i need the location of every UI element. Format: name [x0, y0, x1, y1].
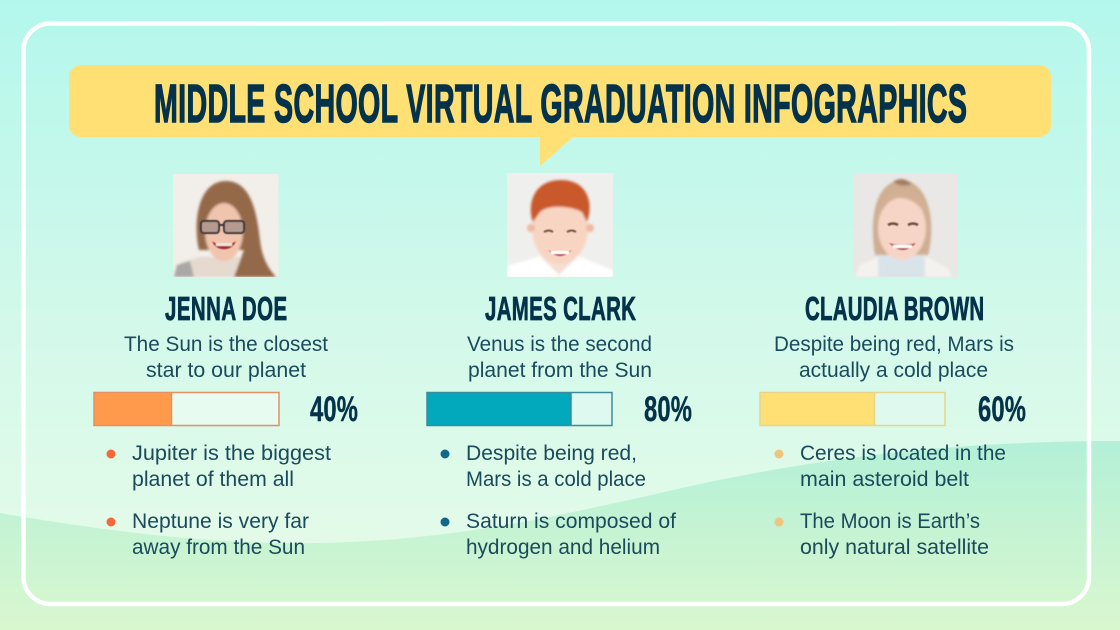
description: Venus is the second — [467, 333, 652, 356]
bullet list — [106, 442, 331, 559]
photo: Claudia Brown — [853, 174, 958, 277]
description: planet from the Sun — [468, 359, 652, 382]
progress bar 40% — [94, 392, 279, 426]
description — [774, 333, 1014, 382]
name: CLAUDIA BROWN — [805, 290, 984, 327]
description — [467, 333, 652, 382]
photo: James Clark — [507, 173, 613, 277]
description: The Sun is the closest — [124, 333, 328, 356]
percentage: 60% — [978, 391, 1026, 429]
bullet list — [440, 442, 676, 559]
description: Despite being red, Mars is — [774, 333, 1014, 356]
bullet list — [774, 442, 1006, 559]
name: JAMES CLARK — [485, 290, 636, 327]
bullet list: away from the Sun — [132, 536, 305, 559]
column: Jenna Doe — [94, 174, 358, 559]
bullet list: Despite being red, — [466, 442, 637, 465]
bullet list: Mars is a cold place — [466, 468, 646, 491]
description: star to our planet — [146, 359, 306, 382]
bullet list: Neptune is very far — [132, 510, 309, 533]
bullet list: Jupiter is the biggest — [132, 442, 331, 465]
bullet list: main asteroid belt — [800, 468, 969, 491]
bullet list: planet of them all — [132, 468, 294, 491]
percentage: 80% — [644, 391, 692, 429]
bullet list: only natural satellite — [800, 536, 989, 559]
name: JENNA DOE — [165, 290, 287, 327]
column: Claudia Brown — [760, 174, 1026, 559]
column: James Clark — [427, 173, 692, 559]
bullet list: hydrogen and helium — [466, 536, 660, 559]
title: MIDDLE SCHOOL VIRTUAL GRADUATION INFOGRAPHICS — [154, 75, 967, 134]
bullet list: Saturn is composed of — [466, 510, 676, 533]
description: actually a cold place — [799, 359, 988, 382]
progress bar 80% — [427, 392, 612, 426]
title speech bubble — [69, 65, 1051, 166]
progress bar 60% — [760, 392, 945, 426]
photo: Jenna Doe — [173, 174, 278, 277]
bullet list: The Moon is Earth’s — [800, 510, 980, 533]
description — [124, 333, 328, 382]
bullet list: Ceres is located in the — [800, 442, 1006, 465]
percentage: 40% — [310, 391, 358, 429]
background wave — [0, 441, 1120, 630]
